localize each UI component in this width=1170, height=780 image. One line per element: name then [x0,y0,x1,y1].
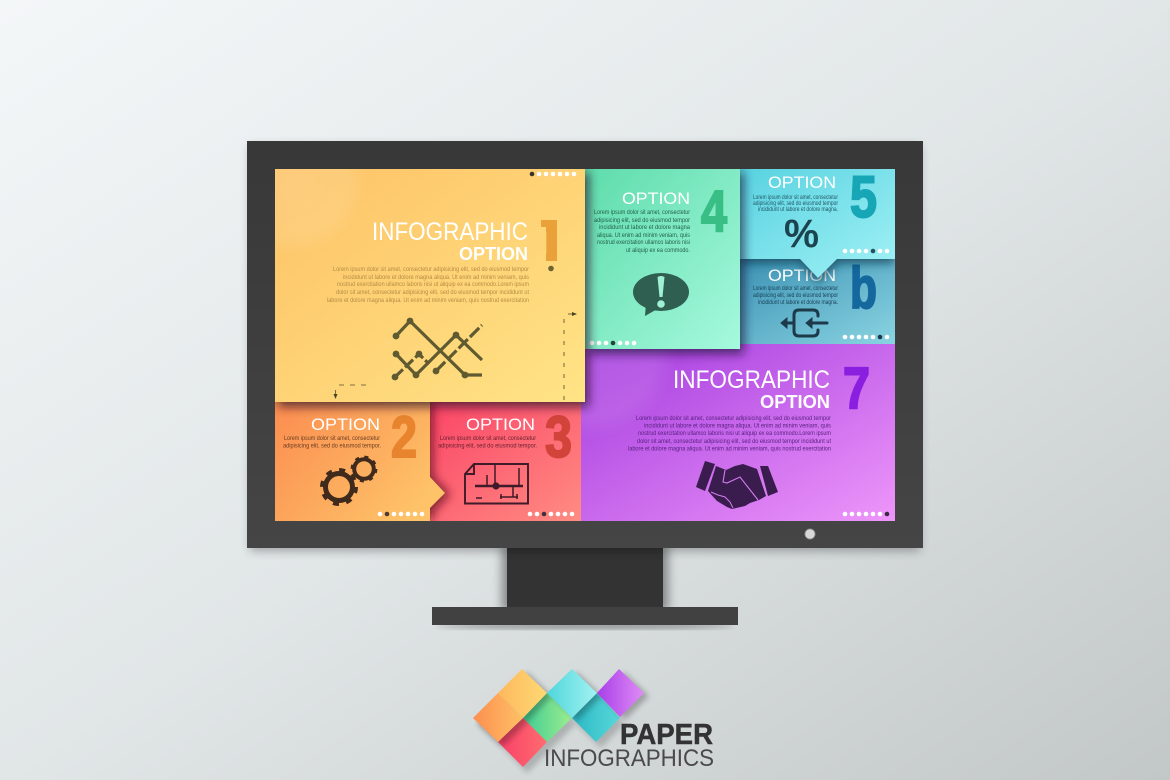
body text [327,267,529,304]
number 3: 3 [545,405,572,470]
body text: Lorem ipsum dolor sit amet, consectetur [440,436,536,442]
heading: INFOGRAPHIC [372,218,528,246]
icon: speech bubble with exclamation [633,273,689,316]
pagination dots [590,341,636,345]
monitor stand base [432,607,738,629]
body text: nostrud exercitation ullamco laboris nisi ut aliquip ex ea commodo.Lorem ipsum [337,282,529,288]
icon: handshake [696,461,778,509]
heading: OPTION [760,392,830,412]
body text [283,436,381,450]
number 1 [541,220,557,261]
monitor [247,141,923,629]
body text: Lorem ipsum dolor sit amet, consectetur [284,436,380,442]
body text: incididunt ut labore et dolore magna. [758,207,838,213]
body text [594,210,691,254]
logo word: PAPER: PAPER [620,719,713,751]
body text [438,436,537,450]
body text: incididunt ut labore et dolore magna. [758,300,838,306]
panel 4: option [585,169,744,354]
pagination dots [530,172,576,176]
number 1: 1 [536,208,566,275]
panel 3: option [430,402,581,521]
body text [753,195,838,213]
heading [372,218,528,264]
icon: percent: % [784,212,819,256]
pagination dots [528,512,574,516]
number 5: 5 [850,165,877,230]
body text: Lorem ipsum dolor sit amet, consectetur adipisicing elit, sed do eiusmod tempor [333,267,529,273]
panel 7: infographic option [581,344,895,521]
heading: OPTION [311,415,380,434]
body text: nostrud exercitation ullamco laboris nisi ut aliquip ex ea commodo.Lorem ipsum [638,431,831,437]
body text: labore et dolore magna aliqua. Ut enim ad minim veniam, quis nostrud exercitation [628,446,831,452]
body text: dolor sit amet, consectetur adipisicing elit, sed do eiusmod tempor incididunt ut [336,290,529,296]
icon: gears [322,457,376,504]
monitor stand neck [502,545,668,611]
number 4: 4 [701,179,727,244]
body text: adipisicing elit, sed do eiusmod tempor [594,218,690,224]
icon: network lines [392,318,482,380]
body text: ut aliquip ex ea commodo. [626,248,690,254]
body text: Lorem ipsum dolor sit amet, consectetur [594,210,690,216]
dashed connector with right arrow [564,312,577,402]
monitor frame [247,141,923,551]
panel 5: option with pointer tab [740,165,895,283]
panel 2: option with arrow tab [275,402,450,521]
panel 1: infographic option [275,169,597,415]
body text: Lorem ipsum dolor sit amet, consectetur [753,286,838,292]
number 6: b [850,256,877,321]
heading: INFOGRAPHIC [673,366,830,394]
heading [673,366,830,412]
body text: Lorem ipsum dolor sit amet, consectetur [753,195,838,201]
body text [753,286,838,306]
logo mark: coloured diamonds [473,669,649,773]
body text: dolor sit amet, consectetur adipisicing elit, sed do eiusmod tempor incididunt ut [637,439,831,445]
icon: exit arrow [781,310,827,336]
pagination dots [843,512,889,516]
heading: OPTION [466,415,535,434]
pagination dots [843,335,889,339]
body text: adipisicing elit, sed do eiusmod tempor [753,293,838,299]
body text: adipisicing elit, sed do eiusmod tempor [753,201,838,207]
body text [628,416,831,452]
body text: aliqua. Ut enim ad minim veniam, quis [597,233,690,239]
body text: nostrud exercitation ullamco laboris nisi [597,240,690,246]
body text: labore et dolore magna aliqua. Ut enim ad minim veniam, quis nostrud exercitation [327,298,529,304]
body text: Lorem ipsum dolor sit amet, consectetur adipisicing elit, sed do eiusmod tempor [636,416,831,422]
body text: adipisicing elit, sed do eiusmod tempor. [438,444,537,450]
body text: adipisicing elit, sed do eiusmod tempor. [283,444,381,450]
icon: blueprint [465,464,528,504]
heading: OPTION [622,189,690,208]
dashed connector vertical from dot [548,266,554,330]
number 7: 7 [843,356,870,421]
heading: OPTION [768,266,836,285]
heading: OPTION [459,244,528,264]
pagination dots [843,249,889,253]
logo word: INFOGRAPHICS: INFOGRAPHICS [544,745,714,772]
dashed connector with down arrow [334,385,368,399]
body text: incididunt ut labore et dolore magna aliqua. Ut enim ad minim veniam, quis [644,424,831,430]
pagination dots [378,512,424,516]
panel 6: option [740,256,895,344]
heading: OPTION [768,173,836,192]
power button [805,529,815,539]
number 2: 2 [391,405,417,470]
logo: paper infographics [473,669,714,773]
body text: incididunt ut labore et dolore magna [599,225,691,231]
body text: incididunt ut labore et dolore magna aliqua. Ut enim ad minim veniam, quis [343,275,529,281]
